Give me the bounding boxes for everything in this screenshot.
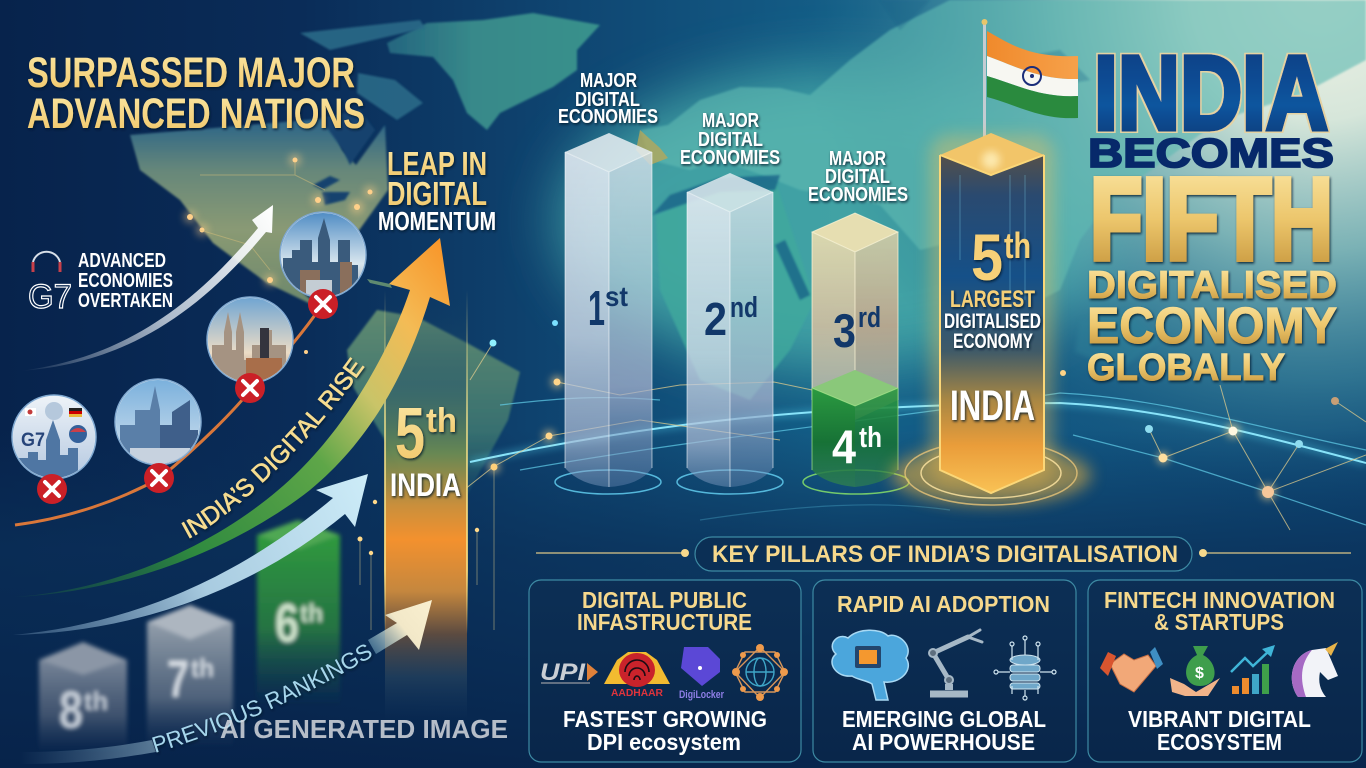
Britain bbox=[636, 130, 668, 165]
icon: money bag in hand bbox=[1170, 646, 1220, 696]
Cuba bbox=[367, 279, 392, 288]
bar: 8th: 8 bbox=[59, 681, 83, 740]
Arctic islands bbox=[300, 20, 425, 120]
heading: leap in digital momentum: LEAP IN bbox=[387, 145, 487, 182]
Africa bbox=[656, 180, 815, 400]
city: G7 flags: G7 bbox=[21, 430, 45, 451]
icon: growth chart bbox=[1231, 645, 1275, 694]
main title bbox=[1087, 35, 1337, 389]
label: major digital economies 1 bbox=[558, 70, 658, 128]
icon: UPI bbox=[540, 659, 598, 686]
heading: leap in digital momentum: DIGITAL bbox=[387, 175, 487, 212]
city lights on map bbox=[184, 154, 376, 354]
column 3rd: 3 bbox=[833, 304, 856, 357]
label: major digital economies 3 bbox=[808, 148, 908, 206]
Australia bbox=[1075, 310, 1160, 370]
icon: flag of India bbox=[987, 31, 1078, 118]
heading: leap in digital momentum bbox=[378, 145, 496, 236]
section header: key pillars: KEY PILLARS OF INDIA’S DIGITALISATION bbox=[712, 541, 1178, 568]
icon: DigiLocker bbox=[679, 647, 725, 701]
dark seas bbox=[652, 0, 1090, 300]
label: major digital economies 2: ECONOMIES bbox=[680, 147, 780, 169]
icon: unicorn bbox=[1292, 642, 1338, 697]
bar: 7th: th bbox=[191, 653, 214, 683]
column 3rd: rd bbox=[858, 302, 881, 334]
main title: DIGITALISED bbox=[1087, 264, 1337, 307]
icon: DigiLocker: DigiLocker bbox=[679, 689, 725, 701]
bar: 6th: 6 bbox=[275, 592, 299, 654]
panel: fintech innovation bbox=[1088, 580, 1362, 762]
bar: India 5th: INDIA bbox=[390, 467, 461, 503]
arrow: light blue bbox=[13, 474, 368, 635]
panel: digital public infrastructure: DPI ecosystem bbox=[587, 729, 741, 755]
bar: 7th: 7 bbox=[167, 650, 189, 709]
label: major digital economies 1: ECONOMIES bbox=[558, 106, 658, 128]
panel: fintech innovation: & STARTUPS bbox=[1154, 609, 1284, 635]
panel: digital public infrastructure bbox=[529, 580, 801, 762]
bar: India 5th bbox=[384, 290, 468, 720]
column 2nd: nd bbox=[730, 292, 758, 324]
G7 advanced economies note bbox=[28, 250, 173, 316]
main title: GLOBALLY bbox=[1087, 347, 1285, 389]
arrow: India's digital rise bbox=[24, 238, 450, 596]
main title: BECOMES bbox=[1088, 130, 1334, 176]
panel: rapid AI adoption: RAPID AI ADOPTION bbox=[837, 591, 1050, 617]
column 5th India: LARGEST bbox=[950, 286, 1035, 313]
icon: Aadhaar bbox=[604, 652, 670, 699]
G7 advanced economies note: ADVANCED bbox=[78, 250, 166, 272]
arrow: previous rankings bbox=[34, 600, 432, 764]
heading: surpassed major advanced nations: ADVANCED NATIONS bbox=[27, 90, 365, 138]
city: third bbox=[115, 379, 201, 466]
label: major digital economies 2: DIGITAL bbox=[698, 129, 763, 151]
panel: fintech innovation: FINTECH INNOVATION bbox=[1104, 587, 1335, 613]
label: major digital economies 2 bbox=[680, 110, 780, 169]
column 3rd bbox=[812, 213, 898, 420]
bar: 7th bbox=[147, 605, 233, 748]
label: major digital economies 2: MAJOR bbox=[702, 110, 759, 132]
icon: robot arm bbox=[929, 630, 982, 694]
orange connector line bbox=[15, 305, 322, 525]
bar: 6th bbox=[257, 520, 340, 705]
section header: key pillars bbox=[536, 537, 1351, 571]
arrow: white rise arrow bbox=[20, 205, 273, 371]
G7 advanced economies note: ECONOMIES bbox=[78, 270, 173, 292]
city: second bbox=[207, 297, 293, 384]
column 5th India: ECONOMY bbox=[953, 330, 1033, 353]
network lines and glow rings bbox=[460, 320, 1366, 530]
column 5th India: 5 bbox=[971, 220, 1003, 294]
previous rank bars bbox=[39, 520, 340, 752]
heading: leap in digital momentum: MOMENTUM bbox=[378, 206, 496, 236]
icon: UPI: UPI bbox=[540, 659, 586, 686]
city: G7 flags bbox=[12, 395, 96, 479]
column 5th India: DIGITALISED bbox=[944, 310, 1041, 333]
icon: database network bbox=[994, 636, 1056, 700]
bar: 8th bbox=[39, 642, 127, 752]
G7 advanced economies note: OVERTAKEN bbox=[78, 290, 173, 312]
floor darkening bbox=[0, 430, 1366, 768]
label: major digital economies 3: DIGITAL bbox=[825, 166, 890, 188]
icon: handshake bbox=[1100, 647, 1163, 692]
flag pole bbox=[982, 19, 988, 157]
column 5th India bbox=[891, 133, 1091, 505]
bar: 8th: th bbox=[84, 686, 108, 716]
panel: digital public infrastructure: DIGITAL PUBLIC bbox=[582, 587, 747, 613]
watermark: AI GENERATED IMAGE bbox=[220, 714, 508, 744]
column 2nd: 2 bbox=[704, 293, 727, 345]
column 4th: th bbox=[859, 422, 882, 454]
icon: G7 logo: G7 bbox=[28, 278, 72, 316]
panel: rapid AI adoption bbox=[813, 580, 1076, 762]
world map bbox=[130, 0, 1366, 540]
label: previous rankings: PREVIOUS RANKINGS bbox=[152, 644, 373, 754]
label: major digital economies 1: MAJOR bbox=[580, 70, 637, 92]
bar: India 5th: 5 bbox=[395, 394, 425, 474]
column 4th bbox=[803, 370, 909, 494]
sparks on sticks bbox=[358, 470, 494, 630]
panel: rapid AI adoption: EMERGING GLOBAL bbox=[842, 706, 1046, 732]
bar: India 5th: th bbox=[426, 402, 457, 440]
column 1st: 1 bbox=[588, 282, 605, 336]
column 1st bbox=[555, 133, 661, 494]
South America bbox=[347, 310, 520, 540]
panel: rapid AI adoption: AI POWERHOUSE bbox=[852, 729, 1035, 755]
column 2nd bbox=[677, 173, 783, 494]
panel: fintech innovation: ECOSYSTEM bbox=[1157, 729, 1282, 755]
city: top bbox=[280, 212, 366, 298]
icon: Aadhaar: AADHAAR bbox=[611, 688, 664, 699]
heading: surpassed major advanced nations: SURPASSED MAJOR bbox=[27, 49, 355, 97]
icon: G7 logo bbox=[28, 252, 72, 316]
label: India's digital rise: INDIA’S DIGITAL RISE bbox=[181, 357, 366, 540]
label: major digital economies 3: ECONOMIES bbox=[808, 184, 908, 206]
icon: network globe bbox=[732, 644, 788, 701]
Greenland bbox=[387, 13, 600, 130]
label: major digital economies 1: DIGITAL bbox=[575, 89, 640, 111]
main title: ECONOMY bbox=[1087, 297, 1337, 354]
Eurasia bbox=[640, 0, 1366, 300]
column 5th India: th bbox=[1004, 225, 1031, 266]
bar: 6th: th bbox=[300, 598, 323, 628]
North America bbox=[130, 118, 388, 320]
panel: digital public infrastructure: INFASTRUCTURE bbox=[577, 609, 752, 635]
icon: money bag in hand: $ bbox=[1195, 665, 1204, 682]
label: major digital economies 3: MAJOR bbox=[829, 148, 886, 170]
column 1st: st bbox=[605, 281, 628, 312]
panel: fintech innovation: VIBRANT DIGITAL bbox=[1128, 706, 1311, 732]
panel: digital public infrastructure: FASTEST GROWING bbox=[563, 706, 767, 732]
heading: surpassed major advanced nations bbox=[27, 49, 365, 138]
column 5th India: INDIA bbox=[950, 382, 1035, 430]
column 4th: 4 bbox=[832, 420, 856, 473]
badges: red crosses bbox=[37, 289, 338, 504]
icon: AI brain bbox=[832, 630, 908, 700]
